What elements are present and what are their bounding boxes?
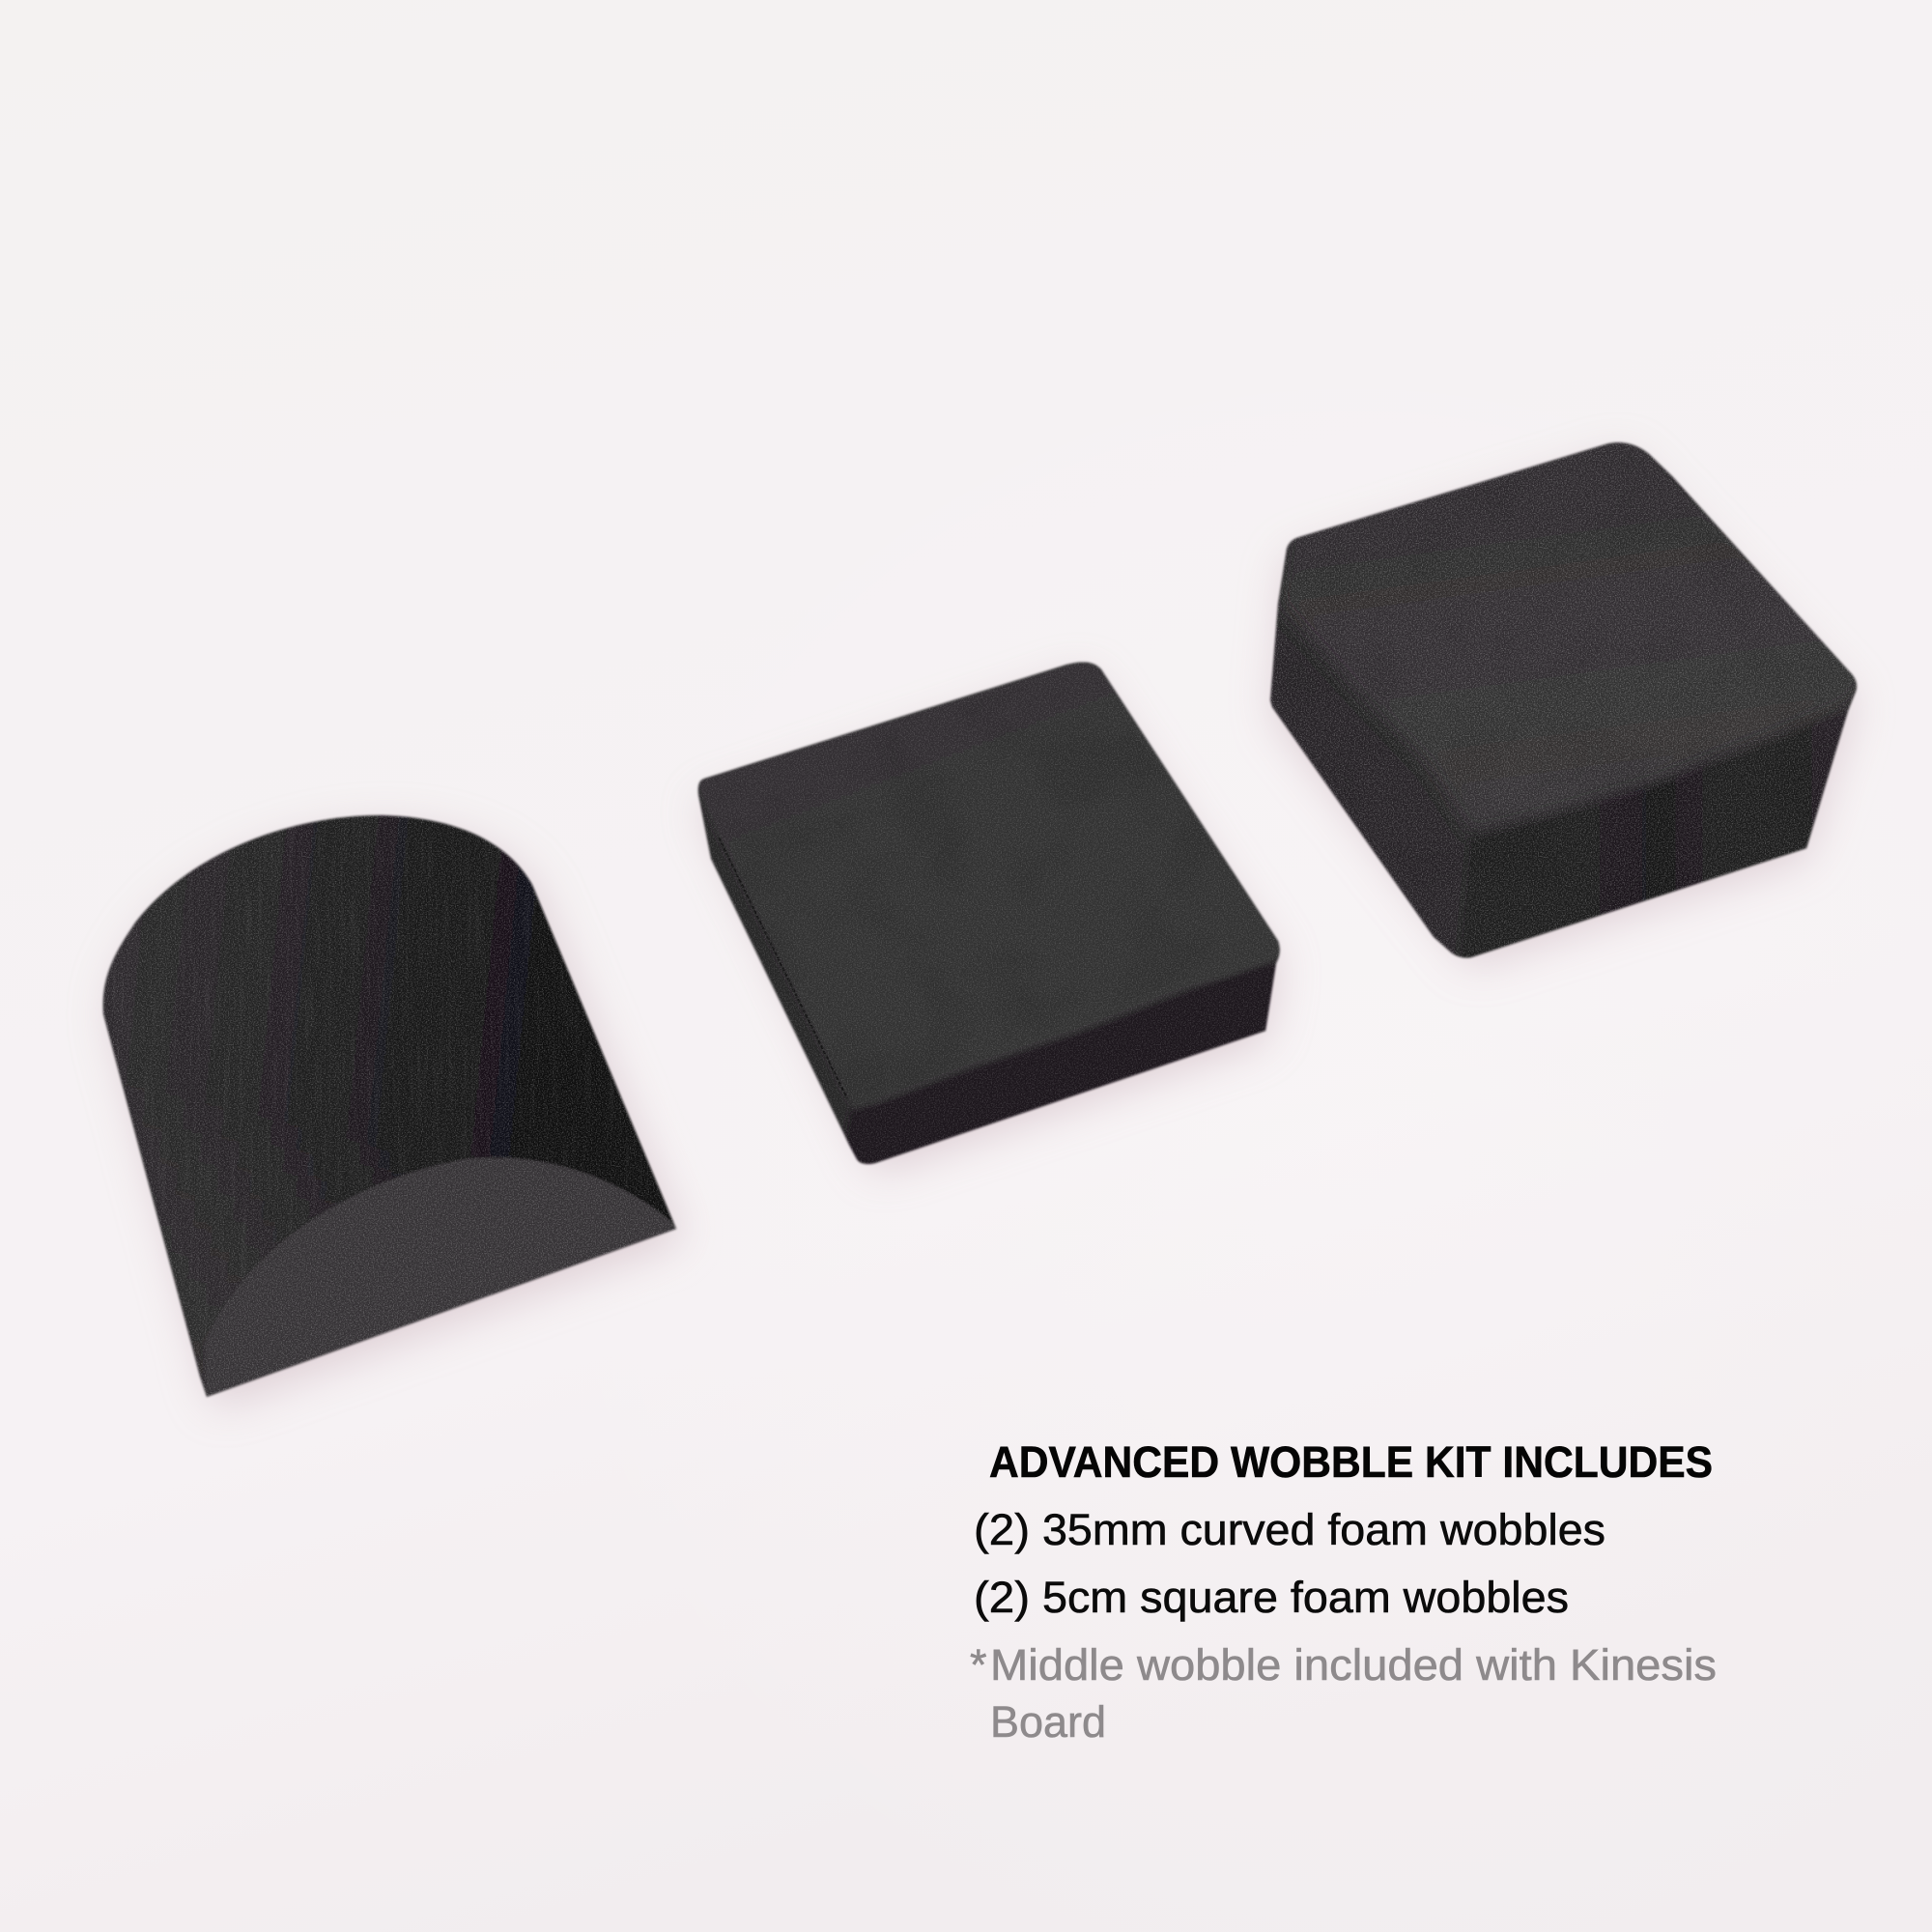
heading: ADVANCED WOBBLE KIT INCLUDES (989, 1437, 1713, 1487)
middle body (686, 647, 1294, 1179)
item: curved wobbles: 35mm curved foam wobbles (1042, 1505, 1605, 1554)
right body (1256, 425, 1874, 976)
footnote: Board (990, 1697, 1106, 1747)
footnote (970, 1640, 1717, 1747)
curved face (205, 1157, 686, 1397)
wobble: curved foam (left) (87, 802, 686, 1410)
product photo infographic (98, 440, 1863, 1738)
middle mottling (698, 663, 1278, 1109)
right grain (1270, 442, 1857, 957)
wobble: tall square foam (right) (1256, 425, 1874, 976)
right mottling (1272, 443, 1852, 957)
wobble: flat square foam (middle) (686, 647, 1294, 1179)
right top (1278, 425, 1874, 833)
middle seam (719, 838, 847, 1098)
shadow: middle wobble (698, 672, 1279, 1173)
shadow: right wobble (1272, 453, 1856, 967)
item: curved wobbles: (2) (974, 1505, 1030, 1554)
curved body and face (87, 802, 686, 1410)
right front side (1461, 709, 1850, 958)
footnote: * (970, 1640, 987, 1690)
shadow: curved wobble (111, 827, 684, 1408)
item: square wobbles: (2) (974, 1573, 1030, 1622)
middle grain (698, 662, 1280, 1164)
curved grain (103, 815, 676, 1397)
item: square wobbles: 5cm square foam wobbles (1042, 1573, 1569, 1622)
middle top (691, 647, 1294, 1109)
text block: kit contents (970, 1437, 1717, 1747)
middle front side (844, 962, 1277, 1165)
footnote: Middle wobble included with Kinesis (990, 1640, 1717, 1690)
curved streak texture (103, 815, 667, 1338)
